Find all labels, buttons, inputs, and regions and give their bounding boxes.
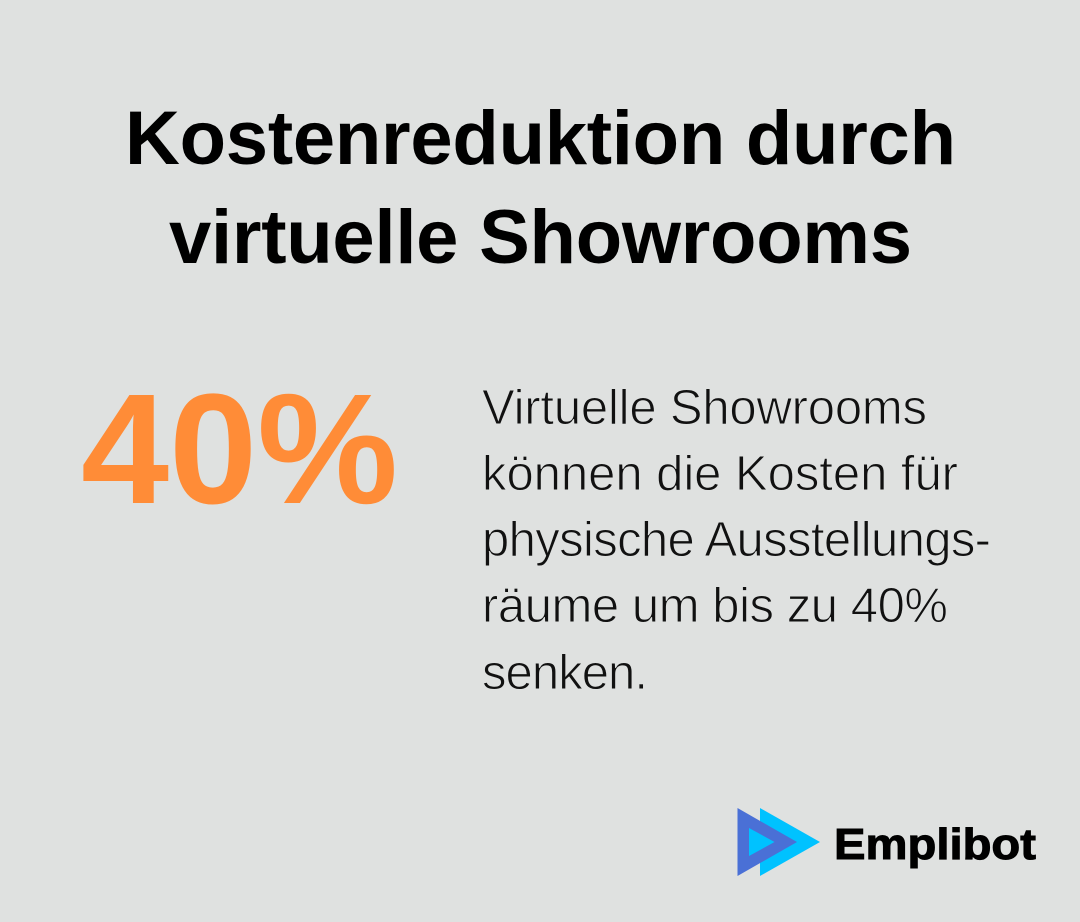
title xyxy=(125,96,956,280)
description text: senken. xyxy=(482,646,648,700)
description text: räume um bis zu 40% xyxy=(482,579,948,633)
description text: können die Kosten für xyxy=(482,447,958,501)
description text xyxy=(482,381,991,700)
logo wordmark: Emplibot xyxy=(834,820,1036,869)
title: virtuelle Showrooms xyxy=(169,195,912,280)
big stat: 40%: 40% xyxy=(81,362,398,537)
description text: physische Ausstellungs- xyxy=(482,513,991,567)
description text: Virtuelle Showrooms xyxy=(482,381,927,435)
logo: Emplibot xyxy=(738,808,1036,876)
title: Kostenreduktion durch xyxy=(125,96,956,181)
icon: play triangles xyxy=(738,808,820,876)
